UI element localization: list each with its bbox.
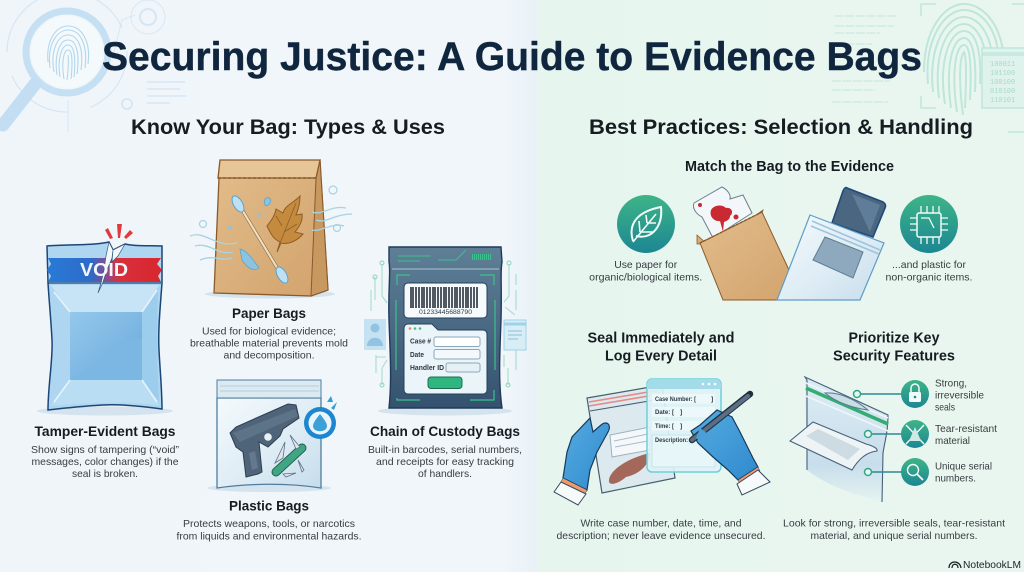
icon: gloved hands logging bag details: Description: <box>655 437 688 444</box>
icon: paper bag <box>190 160 352 298</box>
icon: gloved hands logging bag details: ] <box>680 423 682 430</box>
text: and plastic: ...and plastic for <box>892 259 966 271</box>
text: security description: Look for strong, irreversible seals, tear-resistant <box>783 518 1005 530</box>
text: seal description: description; never leave evidence unsecured. <box>556 530 766 542</box>
text: seal description: Write case number, date, time, and <box>580 518 742 530</box>
text: tamper-evident bags: messages, color changes) if the <box>32 456 179 468</box>
icon: gloved hands logging bag details: ] <box>711 396 713 403</box>
icon: gloved hands logging bag details: Time: [ <box>655 423 675 430</box>
text: chain of custody bags: Built-in barcodes, serial numbers, <box>368 444 522 456</box>
text: plastic bags <box>176 498 362 542</box>
icon: gloved hands logging bag details: Date: [ <box>655 409 675 416</box>
icon: paper bag with stained cloth <box>693 187 803 300</box>
text: paper bags <box>190 305 348 362</box>
icon: tamper-evident bag: VOID <box>80 260 128 280</box>
icon: tear-resistant badge <box>901 420 929 448</box>
text: paper bags: and decomposition. <box>224 350 314 362</box>
panel: know your bag <box>31 116 526 542</box>
text: strong seals: seals <box>935 402 955 414</box>
background: right panel <box>537 0 1024 572</box>
title: Securing Justice: A Guide to Evidence Bags <box>102 35 922 79</box>
text: use paper: organic/biological items. <box>589 272 702 284</box>
subheading: match the bag: Match the Bag to the Evidence <box>685 159 894 175</box>
icon: plastic bag with weapon and tools <box>207 380 337 492</box>
icon: plastic bag with phone <box>777 188 886 300</box>
decoration: binary digits: 010100 <box>990 88 1015 96</box>
text: strong seals: Strong, <box>935 378 967 390</box>
decoration: binary digits <box>990 61 1015 105</box>
icon: gloved hands logging bag details: Case Number: [ <box>655 396 697 403</box>
heading: prioritize key: Prioritize Key <box>848 331 940 347</box>
icon: tamper-evident bag <box>37 224 173 416</box>
decoration: binary digits: 100100 <box>990 79 1015 87</box>
text: and plastic: non-organic items. <box>886 272 972 284</box>
text: tamper-evident bags: seal is broken. <box>72 468 138 480</box>
heading: seal immediately: Seal Immediately and <box>588 331 734 347</box>
text: and plastic <box>886 259 972 284</box>
decoration: binary digits: 100011 <box>990 61 1015 69</box>
text: strong seals: irreversible <box>935 390 984 402</box>
text: seal description <box>556 518 766 542</box>
text: chain of custody bags: and receipts for easy tracking <box>376 456 514 468</box>
icon: secure bag with callouts <box>790 377 902 502</box>
logo: NotebookLM: NotebookLM <box>963 559 1021 571</box>
text: unique serial: Unique serial <box>935 461 992 473</box>
text: chain of custody bags: of handlers. <box>418 468 472 480</box>
icon: padlock badge <box>901 380 929 408</box>
decoration: fingerprint and binary data window <box>832 4 1024 132</box>
icon: gloved hands logging bag details <box>554 379 770 505</box>
text: tamper-evident bags: Show signs of tampering (“void” <box>31 444 179 456</box>
heading: prioritize key <box>833 331 955 365</box>
text: unique serial <box>935 461 992 484</box>
text: plastic bags: from liquids and environmental hazards. <box>176 530 362 542</box>
icon: chain of custody bag: Handler ID <box>410 363 445 372</box>
heading: seal immediately <box>588 331 734 365</box>
text: chain of custody bags: Chain of Custody Bags <box>370 423 520 439</box>
heading: know your bag: Know Your Bag: Types & Uses <box>131 116 445 139</box>
text: use paper: Use paper for <box>614 259 678 271</box>
heading: best practices: Best Practices: Selection & Handling <box>589 116 973 139</box>
text: strong seals <box>935 378 984 414</box>
icon: chain of custody bag: Case # <box>410 336 432 346</box>
text: tamper-evident bags <box>31 423 179 480</box>
heading: prioritize key: Security Features <box>833 349 955 365</box>
decoration: binary digits: 101100 <box>990 70 1015 78</box>
text: paper bags: breathable material prevents mold <box>190 338 348 350</box>
icon: leaf badge <box>617 195 675 253</box>
icon: microchip badge <box>900 195 958 253</box>
text: unique serial: numbers. <box>935 472 976 484</box>
text: security description <box>783 518 1005 542</box>
text: use paper <box>589 259 702 284</box>
text: tear-resistant: Tear-resistant <box>935 423 997 435</box>
text: tamper-evident bags: Tamper-Evident Bags <box>34 423 176 439</box>
icon: gloved hands logging bag details: ] <box>680 409 682 416</box>
heading: seal immediately: Log Every Detail <box>605 349 717 365</box>
text: chain of custody bags <box>368 423 522 480</box>
background: left panel <box>0 0 537 572</box>
text: paper bags: Paper Bags <box>232 305 306 321</box>
text: tear-resistant <box>935 423 997 447</box>
icon: chain of custody bag: Date <box>410 350 424 359</box>
text: plastic bags: Protects weapons, tools, or narcotics <box>183 518 355 530</box>
text: plastic bags: Plastic Bags <box>229 498 309 514</box>
panel: best practices <box>554 116 1005 542</box>
icon: chain of custody bag: 01233445688790 <box>419 309 472 316</box>
decoration: binary digits: 110101 <box>990 97 1015 105</box>
icon: chain of custody bag <box>364 247 526 416</box>
decoration: magnifying glass with fingerprint <box>3 0 187 132</box>
text: paper bags: Used for biological evidence; <box>202 326 336 338</box>
text: security description: material, and unique serial numbers. <box>810 530 978 542</box>
text: tear-resistant: material <box>935 435 970 447</box>
icon: serial number badge <box>901 458 929 486</box>
